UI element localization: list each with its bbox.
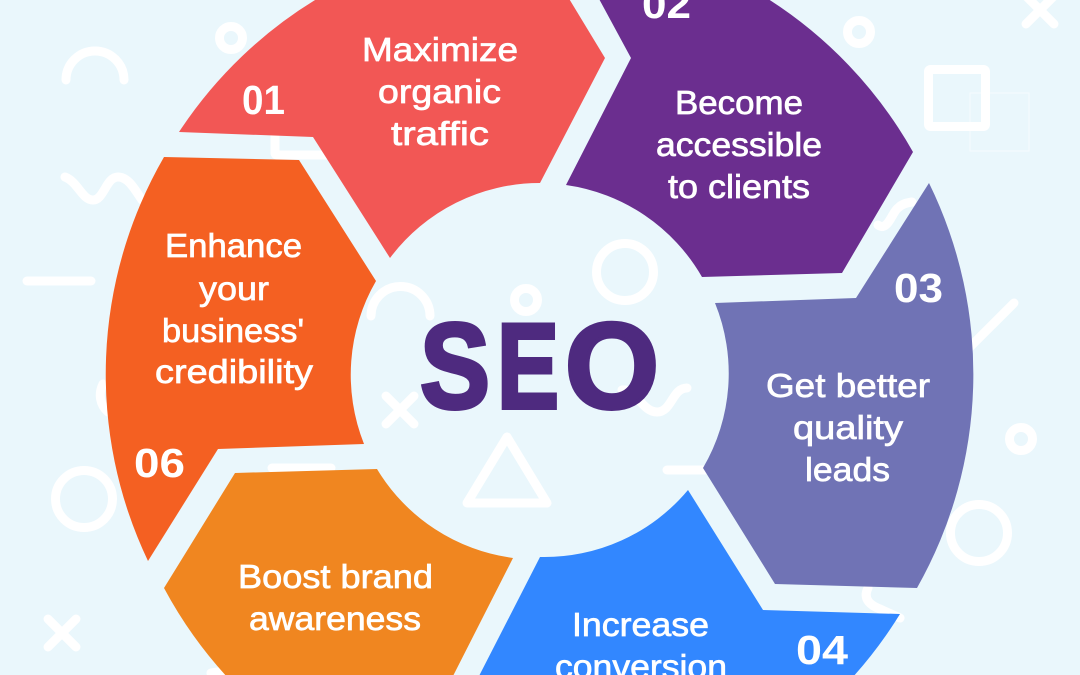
segment 06: enhance your business' credibility: 06 (134, 440, 185, 486)
segment 03: get better quality leads: 03 (894, 265, 943, 311)
segment 05: boost brand awareness: awareness (249, 600, 421, 637)
segment 06: enhance your business' credibility: Enhance (165, 227, 302, 264)
segment 02: become accessible to clients: to clients (668, 168, 810, 205)
segment 03: get better quality leads: leads (805, 451, 890, 488)
segment 03: get better quality leads: quality (793, 409, 904, 446)
segment 06: enhance your business' credibility (106, 157, 376, 561)
segment 05: boost brand awareness: Boost brand (238, 558, 433, 595)
title: SEO: O (565, 298, 659, 434)
segment 04: increase conversion (478, 490, 900, 675)
segment 06: enhance your business' credibility: your (199, 270, 269, 307)
segment 01: maximize organic traffic: Maximize (362, 31, 518, 68)
segment 04: increase conversion: Increase (572, 606, 709, 643)
segment 02: become accessible to clients: Become (675, 84, 803, 121)
title: SEO: S (420, 298, 490, 434)
segment 05: boost brand awareness (164, 469, 513, 675)
segment 01: maximize organic traffic: traffic (391, 115, 489, 152)
segment 01: maximize organic traffic: 01 (242, 77, 285, 123)
segment 02: become accessible to clients: accessible (656, 126, 822, 163)
segment 02: become accessible to clients (566, 0, 913, 277)
title: SEO: E (497, 298, 559, 434)
segment 03: get better quality leads: Get better (766, 367, 930, 404)
segment 06: enhance your business' credibility: credibility (155, 353, 314, 390)
segment 03: get better quality leads (703, 183, 973, 588)
segment 01: maximize organic traffic: organic (378, 73, 501, 110)
segment 06: enhance your business' credibility: business' (162, 312, 304, 349)
segment 01: maximize organic traffic (179, 0, 605, 258)
segment 04: increase conversion: 04 (796, 627, 848, 673)
